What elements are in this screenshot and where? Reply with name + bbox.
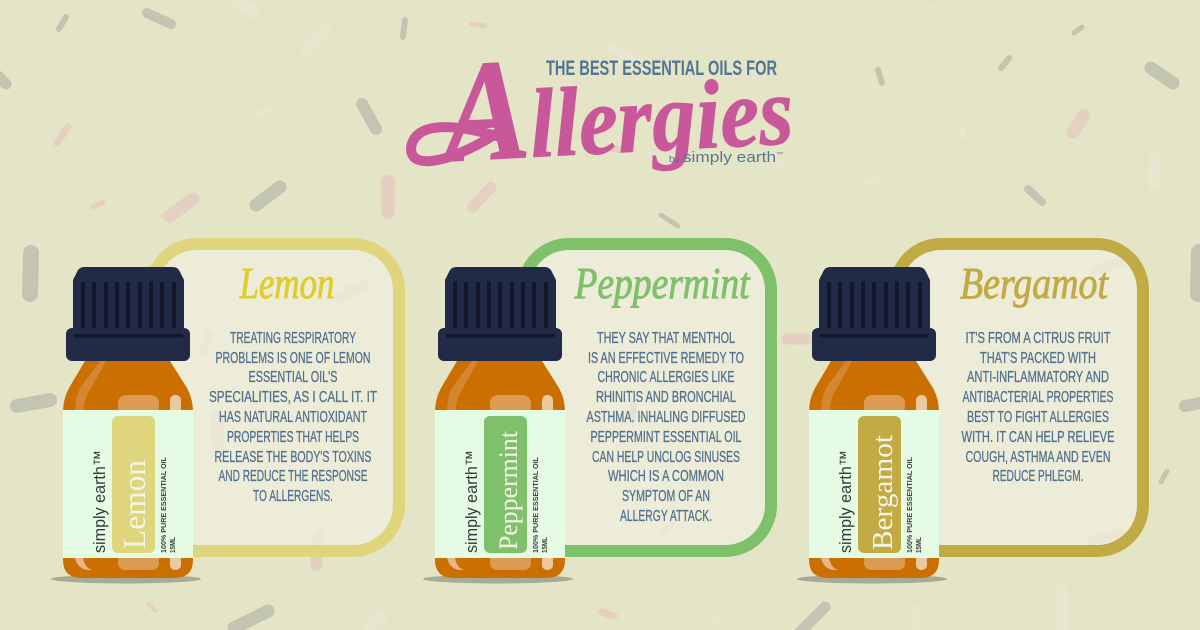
bottle: lemon: simply earth™: [91, 450, 109, 553]
card frame: [523, 244, 771, 551]
card description: THEY SAY THAT MENTHOL: [597, 330, 735, 347]
card description: RHINITIS AND BRONCHIAL: [596, 389, 736, 406]
card heading: Lemon: [239, 259, 334, 308]
bottle: peppermint: [423, 267, 573, 584]
byline: by simply earth: [669, 149, 764, 166]
card description: COUGH, ASTHMA AND EVEN: [966, 449, 1110, 466]
bottle: lemon: 100% PURE ESSENTIAL OIL: [159, 457, 168, 553]
card description: THAT'S PACKED WITH: [980, 350, 1096, 367]
heading: the best essential oils for: THE BEST ESSENTIAL OILS FOR: [546, 57, 777, 80]
bottle: peppermint: simply earth™: [463, 450, 481, 553]
card frame: [151, 244, 399, 551]
card heading: Peppermint: [574, 259, 751, 308]
card description: CAN HELP UNCLOG SINUSES: [592, 449, 740, 466]
card frame: [895, 244, 1143, 551]
card description: [209, 330, 377, 505]
card description: REDUCE PHLEGM.: [992, 468, 1084, 485]
bottle: lemon: Lemon: [116, 460, 152, 549]
panel: bergamot: [797, 244, 1143, 584]
card description: CHRONIC ALLERGIES LIKE: [598, 369, 734, 386]
card description: [962, 330, 1114, 485]
card description: TO ALLERGENS.: [253, 488, 333, 505]
bottle: bergamot: Bergamot: [868, 435, 899, 550]
card description: BEST TO FIGHT ALLERGIES: [967, 409, 1109, 426]
card description: ANTIBACTERIAL PROPERTIES: [962, 389, 1114, 406]
bottle: lemon: [51, 267, 201, 584]
bottle: bergamot: 100% PURE ESSENTIAL OIL: [905, 457, 914, 553]
card description: AND REDUCE THE RESPONSE: [218, 468, 368, 485]
title word: allergies: Allergies: [431, 15, 796, 194]
panel: peppermint: [423, 244, 771, 584]
card description: SPECIALITIES, AS I CALL IT. IT: [209, 389, 377, 406]
card description: WITH. IT CAN HELP RELIEVE: [962, 429, 1114, 446]
bottle: bergamot: [797, 267, 947, 584]
bottle: lemon: 15ML: [168, 537, 177, 553]
bottle: bergamot: 15ML: [914, 537, 923, 553]
byline: ™: [776, 151, 783, 158]
bottle: peppermint: Peppermint: [494, 430, 523, 550]
card description: [586, 330, 746, 525]
card description: SYMPTOM OF AN: [622, 488, 710, 505]
panel: lemon: [51, 244, 399, 584]
card heading: Bergamot: [960, 259, 1110, 308]
card description: TREATING RESPIRATORY: [230, 330, 356, 347]
card description: ESSENTIAL OIL'S: [248, 369, 338, 386]
card description: IS AN EFFECTIVE REMEDY TO: [588, 350, 744, 367]
title: [411, 15, 796, 194]
bottle: peppermint: 100% PURE ESSENTIAL OIL: [531, 457, 540, 553]
card description: ASTHMA. INHALING DIFFUSED: [586, 409, 746, 426]
card description: PEPPERMINT ESSENTIAL OIL: [590, 429, 742, 446]
card description: HAS NATURAL ANTIOXIDANT: [219, 409, 367, 426]
card description: IT'S FROM A CITRUS FRUIT: [966, 330, 1111, 347]
card description: PROPERTIES THAT HELPS: [227, 429, 359, 446]
card description: PROBLEMS IS ONE OF LEMON: [216, 350, 370, 367]
bottle: bergamot: simply earth™: [837, 450, 855, 553]
card description: WHICH IS A COMMON: [608, 468, 724, 485]
card description: ANTI-INFLAMMATORY AND: [967, 369, 1109, 386]
card description: ALLERGY ATTACK.: [620, 508, 712, 525]
card description: RELEASE THE BODY'S TOXINS: [214, 449, 372, 466]
title flourish: [411, 127, 505, 161]
bottle: peppermint: 15ML: [540, 537, 549, 553]
